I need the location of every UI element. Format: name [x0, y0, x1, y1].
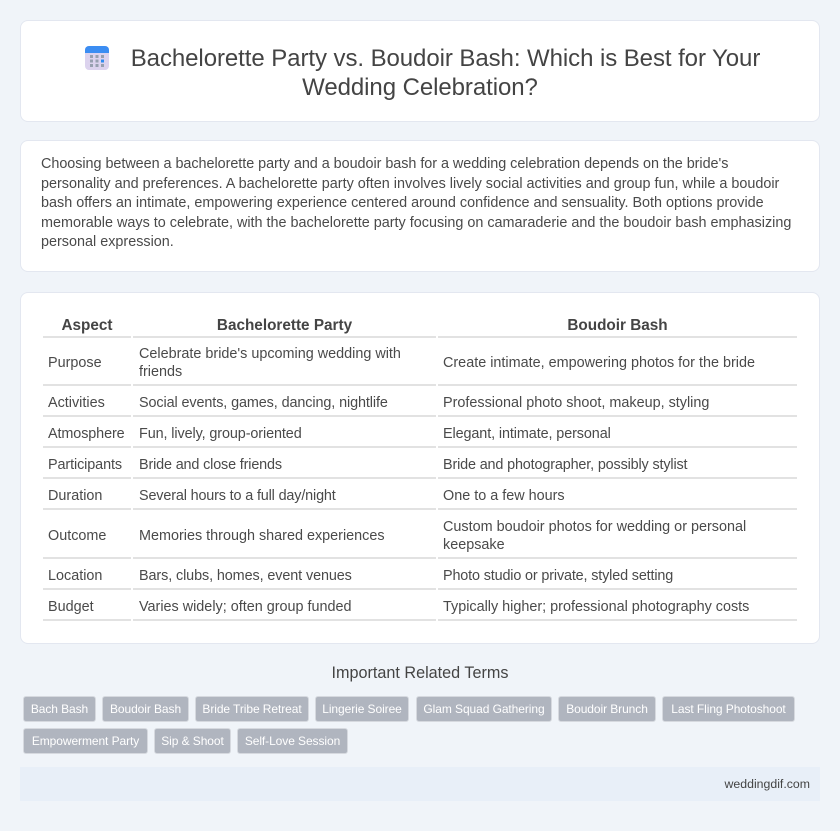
table header: Bachelorette Party	[217, 317, 352, 334]
tag: Boudoir Brunch	[566, 702, 648, 716]
row: Participants: Participants	[48, 457, 122, 473]
tag	[154, 728, 231, 754]
tag	[23, 696, 96, 722]
row: Location: Photo studio or private, styled setting	[443, 568, 673, 584]
row: Purpose: friends	[139, 364, 182, 380]
intro paragraph: Choosing between a bachelorette party and a boudoir bash for a wedding celebration depends on the bride's	[41, 156, 728, 172]
panel: comparison table	[20, 292, 820, 644]
row: Atmosphere	[48, 426, 611, 442]
tag	[662, 696, 795, 722]
row: Participants: Bride and photographer, possibly stylist	[443, 457, 687, 473]
title: Wedding Celebration?	[302, 74, 538, 101]
row: Budget: Varies widely; often group funded	[139, 599, 352, 615]
tag: Boudoir Bash	[110, 702, 181, 716]
row: Location	[48, 568, 673, 584]
row: Activities: Professional photo shoot, makeup, styling	[443, 395, 709, 411]
footer source: weddingdif.com	[725, 777, 810, 791]
title	[131, 45, 760, 101]
row: Purpose: Create intimate, empowering photos for the bride	[443, 355, 755, 371]
row: Purpose: Purpose	[48, 355, 102, 371]
tag	[195, 696, 309, 722]
icon: calendar	[85, 46, 109, 70]
row: Purpose	[48, 346, 755, 380]
title: Bachelorette Party vs. Boudoir Bash: Which is Best for Your	[131, 45, 760, 72]
row: Activities: Social events, games, dancing, nightlife	[139, 395, 388, 411]
row: Outcome: keepsake	[443, 537, 505, 553]
tag: Self-Love Session	[245, 734, 340, 748]
row: Outcome: Memories through shared experiences	[139, 528, 385, 544]
intro paragraph: bash offers an intimate, empowering experience centered around confidence and sensuality. Both options provide	[41, 195, 764, 211]
row: Atmosphere: Elegant, intimate, personal	[443, 426, 611, 442]
row: Duration: Duration	[48, 488, 102, 504]
tag	[102, 696, 189, 722]
table header	[61, 317, 668, 334]
tag: Sip & Shoot	[161, 734, 224, 748]
row: Location: Bars, clubs, homes, event venues	[139, 568, 352, 584]
row: Atmosphere: Fun, lively, group-oriented	[139, 426, 302, 442]
tag: Last Fling Photoshoot	[671, 702, 786, 716]
row: Budget: Typically higher; professional photography costs	[443, 599, 749, 615]
row: Duration: Several hours to a full day/night	[139, 488, 336, 504]
heading: related terms: Important Related Terms	[332, 664, 508, 682]
panel: header	[20, 20, 820, 122]
tag: Glam Squad Gathering	[423, 702, 545, 716]
footer bar	[20, 767, 820, 801]
tag	[237, 728, 348, 754]
panel: introduction text	[20, 140, 820, 272]
tag: Bach Bash	[31, 702, 88, 716]
row: Activities: Activities	[48, 395, 105, 411]
table header: Aspect	[61, 317, 112, 334]
row: Participants	[48, 457, 688, 473]
tag: Lingerie Soiree	[322, 702, 402, 716]
intro paragraph: memorable ways to celebrate, with the bachelorette party focusing on camaraderie and the boudoir bash emphasizing	[41, 214, 791, 230]
table header: Boudoir Bash	[567, 317, 668, 334]
intro paragraph: personality and preferences. A bachelorette party often involves lively social activities and group fun, while a boudoir	[41, 176, 779, 192]
row: Purpose: Celebrate bride's upcoming wedding with	[139, 346, 401, 362]
row: Participants: Bride and close friends	[139, 457, 282, 473]
row: Duration	[48, 488, 565, 504]
tag: Empowerment Party	[32, 734, 139, 748]
tag list	[23, 696, 795, 754]
row: Outcome: Custom boudoir photos for wedding or personal	[443, 519, 746, 535]
row: Budget	[48, 599, 749, 615]
tag	[315, 696, 409, 722]
intro paragraph: personal expression.	[41, 234, 174, 250]
row: Budget: Budget	[48, 599, 94, 615]
row: Outcome: Outcome	[48, 528, 106, 544]
row: Outcome	[48, 519, 746, 553]
row: Activities	[48, 395, 709, 411]
tag: Bride Tribe Retreat	[202, 702, 302, 716]
tag	[23, 728, 148, 754]
row: Location: Location	[48, 568, 102, 584]
tag	[416, 696, 552, 722]
tag	[558, 696, 656, 722]
intro paragraph	[41, 156, 791, 250]
row: Duration: One to a few hours	[443, 488, 565, 504]
row: Atmosphere: Atmosphere	[48, 426, 125, 442]
